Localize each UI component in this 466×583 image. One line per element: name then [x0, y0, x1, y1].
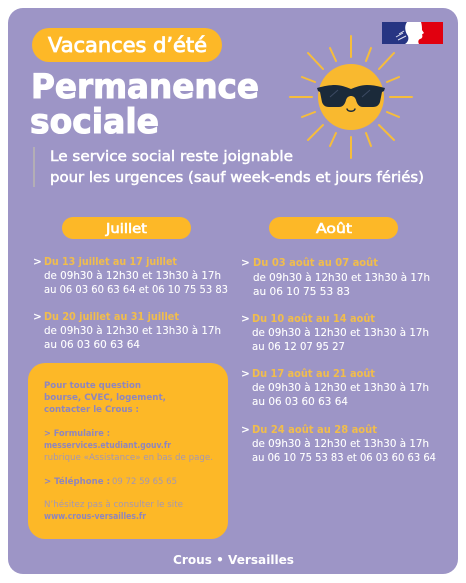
schedule: 17 to 21 août: Du 17 août au 21 août	[252, 367, 375, 380]
schedule: 17 to 21 août	[241, 367, 429, 408]
schedule: 13 to 17 juillet: Du 13 juillet au 17 juillet	[44, 255, 177, 268]
schedule: 24 to 28 août: >	[241, 424, 250, 436]
schedule: 17 to 21 août: au 06 03 60 63 64	[252, 395, 348, 408]
schedule: 24 to 28 août: de 09h30 à 12h30 et 13h30 à 17h	[252, 437, 429, 450]
badge: Vacances d'été: Vacances d’été	[48, 33, 207, 57]
panel: contact box: bourse, CVEC, logement,	[44, 393, 166, 403]
schedule: 13 to 17 juillet: au 06 03 60 63 64 et 06 10 75 53 83	[44, 283, 228, 296]
panel: contact box: N’hésitez pas à consulter le site	[44, 499, 183, 510]
subtitle with side bar: Le service social reste joignable	[50, 149, 293, 165]
schedule: 03 to 07 août: >	[241, 257, 250, 269]
icon: République française flag	[382, 22, 443, 44]
schedule: 17 to 21 août: de 09h30 à 12h30 et 13h30 à 17h	[252, 381, 429, 394]
title: Permanence	[31, 67, 259, 107]
badge: Vacances d'été	[32, 28, 222, 62]
schedule: 03 to 07 août	[241, 256, 430, 298]
panel: contact box: 09 72 59 65 65	[112, 477, 177, 487]
schedule: 13 to 17 juillet: de 09h30 à 12h30 et 13h30 à 17h	[44, 269, 221, 282]
panel: contact box	[28, 363, 228, 539]
schedule: 03 to 07 août: Du 03 août au 07 août	[253, 256, 378, 269]
schedule: 20 to 31 juillet: Du 20 juillet au 31 juillet	[44, 310, 179, 323]
schedule: 13 to 17 juillet: >	[33, 256, 42, 268]
footer: Crous Versailles: Crous • Versailles	[173, 552, 294, 567]
schedule: 03 to 07 août: au 06 10 75 53 83	[253, 285, 350, 298]
schedule: 10 to 14 août: au 06 12 07 95 27	[252, 340, 345, 353]
panel: contact box: www.crous-versailles.fr	[44, 512, 146, 522]
panel: contact box: contacter le Crous :	[44, 405, 139, 415]
schedule: 20 to 31 juillet: de 09h30 à 12h30 et 13h30 à 17h	[44, 324, 221, 337]
panel: contact box: rubrique «Assistance» en bas de page.	[44, 453, 213, 463]
panel: contact box: > Formulaire :	[44, 429, 110, 439]
panel: contact box: > Téléphone :	[44, 476, 110, 487]
month header: Juillet	[62, 217, 191, 239]
schedule: 13 to 17 juillet	[33, 255, 228, 296]
subtitle with side bar	[33, 147, 424, 187]
schedule: 20 to 31 juillet: au 06 03 60 63 64	[44, 338, 140, 351]
schedule: 24 to 28 août: Du 24 août au 28 août	[252, 423, 377, 436]
schedule: 10 to 14 août	[241, 312, 429, 353]
icon: sun with sunglasses	[290, 36, 412, 158]
panel: contact box: messervices.etudiant.gouv.fr	[44, 441, 171, 451]
month header: Août: Août	[316, 222, 352, 237]
month header: Août	[269, 217, 398, 239]
schedule: 10 to 14 août: >	[241, 313, 250, 325]
month header: Juillet: Juillet	[105, 222, 147, 237]
title	[30, 67, 259, 142]
schedule: 10 to 14 août: Du 10 août au 14 août	[252, 312, 375, 325]
schedule: 24 to 28 août: au 06 10 75 53 83 et 06 03 60 63 64	[252, 451, 436, 464]
schedule: 24 to 28 août	[241, 423, 436, 464]
schedule: 10 to 14 août: de 09h30 à 12h30 et 13h30 à 17h	[252, 326, 429, 339]
schedule: 20 to 31 juillet	[33, 310, 221, 351]
subtitle with side bar: pour les urgences (sauf week-ends et jours fériés)	[50, 170, 424, 186]
title: sociale	[30, 102, 159, 142]
schedule: 17 to 21 août: >	[241, 368, 250, 380]
schedule: 20 to 31 juillet: >	[33, 311, 42, 323]
panel: contact box: Pour toute question	[44, 381, 141, 391]
schedule: 03 to 07 août: de 09h30 à 12h30 et 13h30 à 17h	[253, 271, 430, 284]
